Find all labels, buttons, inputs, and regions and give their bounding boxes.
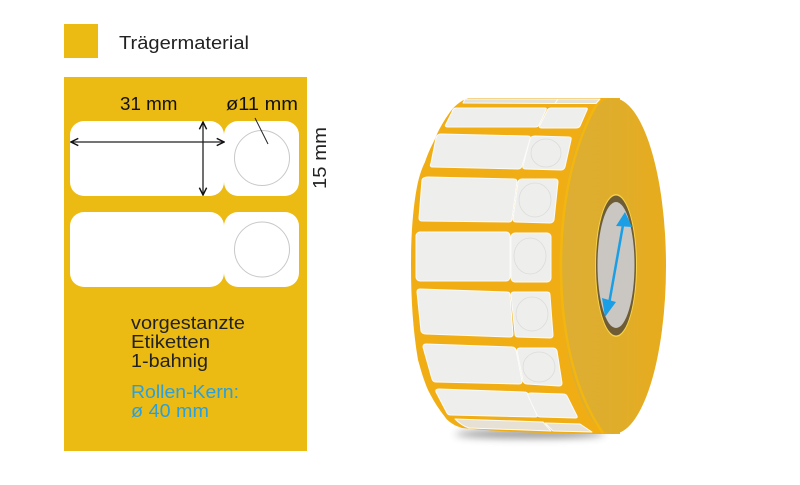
description text: Etiketten <box>131 332 210 352</box>
description text: 1-bahnig <box>131 351 208 371</box>
roll front face <box>411 98 620 434</box>
diameter label: ø11 mm <box>226 94 298 114</box>
description text <box>131 313 245 371</box>
description text: vorgestanzte <box>131 313 245 333</box>
height label: 15 mm <box>310 127 330 189</box>
width arrow <box>71 141 224 143</box>
labels on roll <box>416 99 600 432</box>
photo: label roll <box>411 98 666 438</box>
roll shadow <box>455 430 605 438</box>
label 2 circle tab <box>224 212 299 287</box>
core size text: ø 40 mm <box>131 401 209 421</box>
blue core diameter arrow <box>602 212 632 317</box>
diameter pointer <box>255 118 268 144</box>
label 2 main <box>70 212 224 287</box>
side edge highlight <box>561 99 603 433</box>
legend label: Trägermaterial <box>119 32 249 53</box>
legend swatch <box>64 24 98 58</box>
height arrow <box>202 122 204 195</box>
panel: label layout <box>64 77 307 451</box>
label 1 main <box>70 121 224 196</box>
core size text <box>131 382 239 421</box>
roll core <box>595 194 637 337</box>
die-cut circles on roll <box>514 139 561 382</box>
width label: 31 mm <box>120 93 177 114</box>
roll side face <box>560 98 666 434</box>
core size text: Rollen-Kern: <box>131 382 239 402</box>
label 1 circle tab <box>224 121 299 196</box>
